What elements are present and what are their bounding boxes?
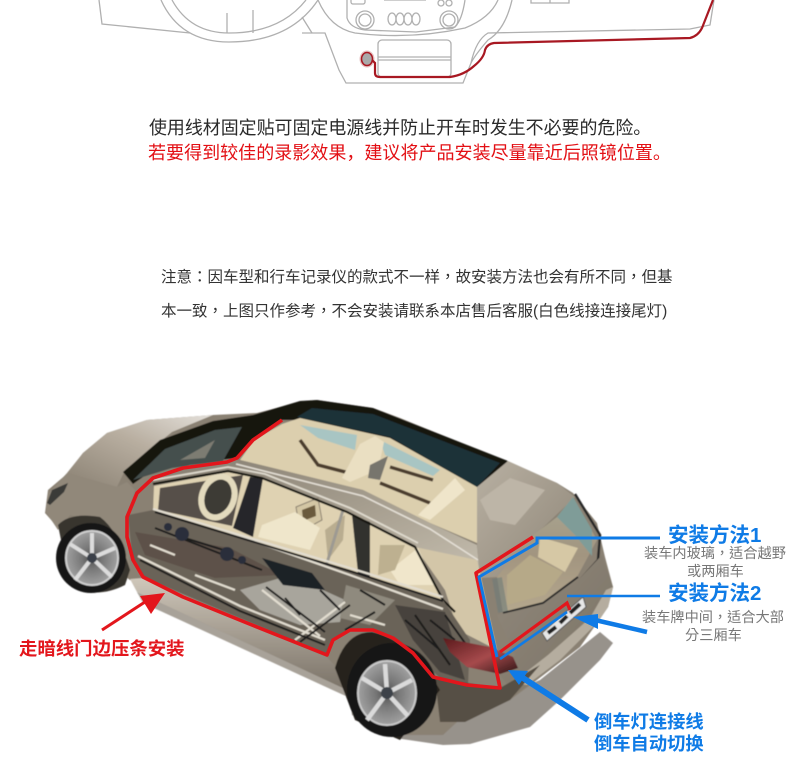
hood xyxy=(67,415,213,487)
rear seats xyxy=(296,498,322,532)
rear lower body xyxy=(435,665,540,722)
license plate xyxy=(542,597,586,641)
rear wheel xyxy=(335,632,440,740)
label: method 1 heading: 安装方法1 xyxy=(668,524,761,547)
car body silhouette xyxy=(45,400,613,735)
label: reverse light wire: 倒车灯连接线 xyxy=(594,711,704,732)
front wheel xyxy=(56,516,130,593)
rear hatch window xyxy=(497,497,597,613)
windshield and roof frame xyxy=(123,400,508,490)
note line 1: 注意：因车型和行车记录仪的款式不一样，故安装方法也会有所不同，但基 xyxy=(161,269,673,286)
side sill xyxy=(130,578,347,690)
B pillar xyxy=(233,477,263,537)
blue arrow to plate xyxy=(573,614,647,632)
front fender xyxy=(46,473,135,570)
C pillar xyxy=(352,515,370,577)
wood trim xyxy=(300,440,433,503)
tail lamp xyxy=(443,638,518,674)
glass behind seats xyxy=(300,425,440,476)
method 2 description: 装车牌中间，适合大部 xyxy=(642,610,784,626)
blue wire method 2 xyxy=(500,596,660,659)
socket xyxy=(360,50,374,68)
red arrow to door sill xyxy=(102,593,165,630)
label: method 2 heading: 安装方法2 xyxy=(668,582,761,605)
interior seen through roof xyxy=(240,418,477,543)
blue arrow to reverse light xyxy=(508,670,588,720)
roof side band xyxy=(150,460,480,590)
mechanical detail strokes xyxy=(138,509,443,640)
method 1 description line 2: 或两厢车 xyxy=(687,564,744,580)
tailgate and bumper xyxy=(497,555,613,695)
window frame lines xyxy=(153,471,455,612)
blue wire method 1 xyxy=(479,538,660,657)
label: reverse auto switch: 倒车自动切换 xyxy=(594,733,704,754)
front window dark interior xyxy=(158,475,243,526)
method 1 description: 装车内玻璃，适合越野 xyxy=(644,546,786,562)
steering wheel xyxy=(196,472,240,522)
headlight xyxy=(47,483,68,505)
red wire to plate xyxy=(500,603,570,652)
dashboard line drawing with power cable xyxy=(98,0,715,84)
method 2 description line 2: 分三厢车 xyxy=(685,628,742,644)
red warning text: 若要得到较佳的录影效果，建议将产品安装尽量靠近后照镜位置。 xyxy=(148,143,671,163)
rear quarter panel xyxy=(477,461,575,578)
red wire route xyxy=(127,420,533,688)
ground shadow xyxy=(137,593,613,745)
lower cutaway mechanicals xyxy=(128,510,470,685)
note line 2: 本一致，上图只作参考，不会安装请联系本店售后客服(白色线接连接尾灯) xyxy=(161,303,667,320)
label: hidden wire route: 走暗线门边压条安装 xyxy=(19,638,185,659)
instruction text: 使用线材固定贴可固定电源线并防止开车时发生不必要的危险。 xyxy=(149,118,651,138)
power cable xyxy=(372,0,713,77)
side windows and interior xyxy=(153,472,443,600)
